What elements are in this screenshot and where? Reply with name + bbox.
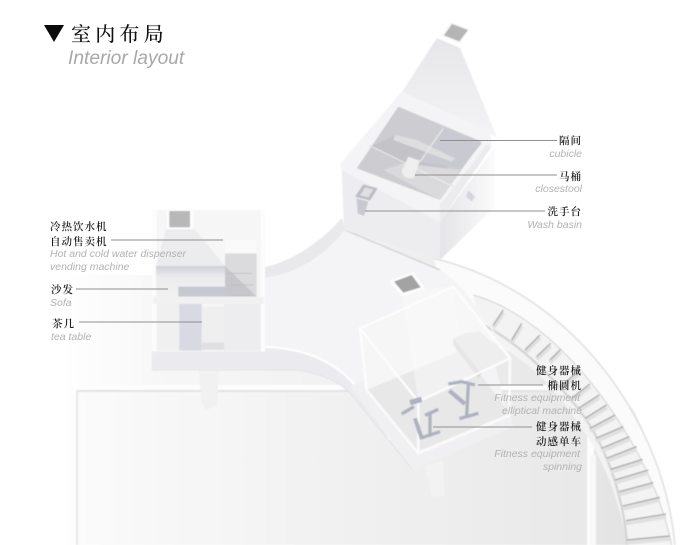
elliptical machine: [448, 382, 478, 419]
front rim glass: [350, 167, 440, 212]
room: fitness: [350, 272, 513, 470]
outer walls: [342, 170, 440, 260]
wash basin: [355, 184, 378, 216]
callout: tea table: 茶几: [52, 317, 75, 330]
skylight: [167, 208, 193, 229]
title english: Interior layout: [68, 48, 185, 69]
title: [44, 23, 185, 69]
callout: wash basin: Wash basin: [527, 219, 582, 231]
curved staircase: [433, 258, 675, 545]
platform: [350, 380, 513, 470]
platform front: [152, 352, 265, 370]
room shell: [153, 210, 265, 352]
callout: spinning bike: Fitness equipment: [494, 448, 581, 460]
back walls: [360, 287, 462, 390]
callout: water dispenser and vending machine: vending machine: [50, 261, 130, 273]
support pillar: lounge: [199, 370, 219, 410]
callout: water dispenser and vending machine: 自动售卖机: [50, 235, 108, 248]
callout: wash basin: [365, 205, 582, 231]
callout: spinning bike: spinning: [543, 461, 582, 473]
support pillar: fitness room: [425, 460, 445, 497]
callout: spinning bike: [433, 420, 582, 473]
cubicle partition: [372, 128, 460, 190]
skylight: [441, 22, 470, 43]
ground shading: [0, 225, 674, 545]
callout: closestool: closestool: [535, 183, 583, 195]
callout: elliptical machine: elliptical machine: [502, 405, 582, 417]
callout: closestool: [415, 170, 583, 195]
divider: [153, 297, 264, 304]
light shaft: [156, 229, 225, 266]
closestool: [402, 157, 420, 178]
tea table: [202, 307, 224, 350]
callout: tea table: [51, 317, 202, 343]
light shaft: [402, 287, 510, 402]
callout: cubicle: cubicle: [549, 148, 582, 160]
lower floor frame: [70, 385, 596, 545]
vending machine: [225, 240, 257, 297]
bench: [453, 332, 510, 373]
callout: elliptical machine: 健身器械: [536, 364, 582, 377]
top rim: [340, 92, 492, 222]
callout: spinning bike: 动感单车: [536, 435, 582, 448]
skylight: [389, 272, 425, 296]
callout: sofa: Sofa: [50, 297, 72, 309]
callout: wash basin: 洗手台: [548, 205, 582, 218]
walkway platform: [152, 218, 510, 470]
callout: elliptical machine: Fitness equipment: [494, 392, 581, 404]
interior: [357, 107, 482, 200]
callout: sofa: [50, 283, 168, 309]
callout: cubicle: [440, 134, 582, 160]
light shaft: [400, 38, 497, 137]
callout: elliptical machine: 椭圆机: [548, 379, 582, 392]
callout: elliptical machine: [478, 364, 582, 417]
callout: cubicle: 隔间: [559, 134, 582, 147]
lower floor: [157, 304, 179, 351]
icon: triangle marker: [44, 25, 64, 42]
callout: closestool: 马桶: [559, 170, 582, 183]
spinning bike: [402, 399, 440, 438]
callout: water dispenser and vending machine: Hot and cold water dispenser: [50, 248, 186, 260]
glass frame: [360, 287, 510, 453]
callout: sofa: 沙发: [51, 283, 74, 296]
callout: water dispenser and vending machine: 冷热饮水机: [50, 220, 108, 233]
title chinese: 室内布局: [71, 23, 168, 46]
callout: tea table: tea table: [51, 331, 91, 343]
room: lounge: [152, 208, 265, 370]
sofa: [156, 266, 225, 297]
room: toilet: [340, 22, 497, 260]
callout: water dispenser and vending machine: [50, 220, 223, 273]
room floor: [367, 350, 510, 452]
callout: spinning bike: 健身器械: [536, 420, 582, 433]
